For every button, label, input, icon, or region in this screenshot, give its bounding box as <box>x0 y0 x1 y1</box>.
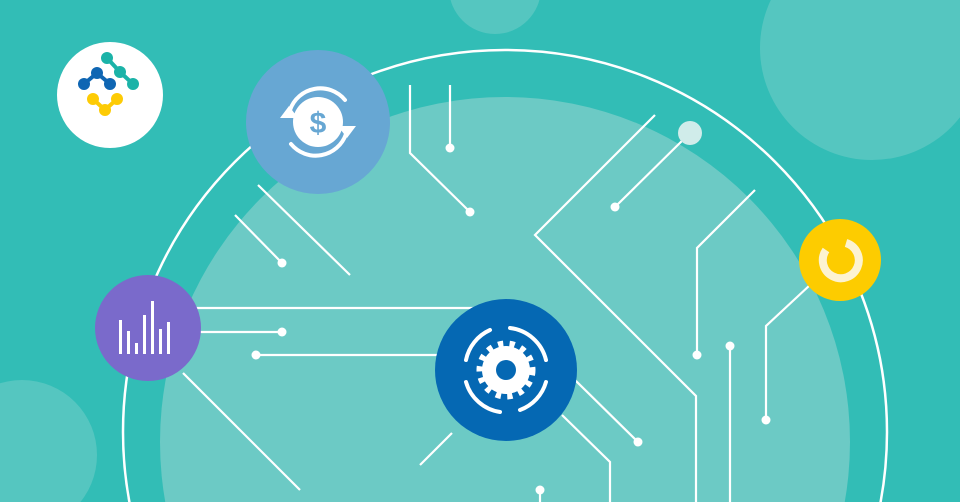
icon: dollar cycle: $ <box>310 107 327 140</box>
circuit lines <box>183 85 810 502</box>
icon: dollar cycle <box>246 50 390 194</box>
light node <box>678 121 702 145</box>
circuit dots <box>252 144 770 494</box>
icon: logo <box>57 42 163 148</box>
icon: bar chart <box>95 275 201 381</box>
inner disk <box>160 97 850 502</box>
outer ring <box>123 50 887 502</box>
icon: yellow loader <box>799 219 881 301</box>
icon: gear cycle <box>435 299 577 441</box>
